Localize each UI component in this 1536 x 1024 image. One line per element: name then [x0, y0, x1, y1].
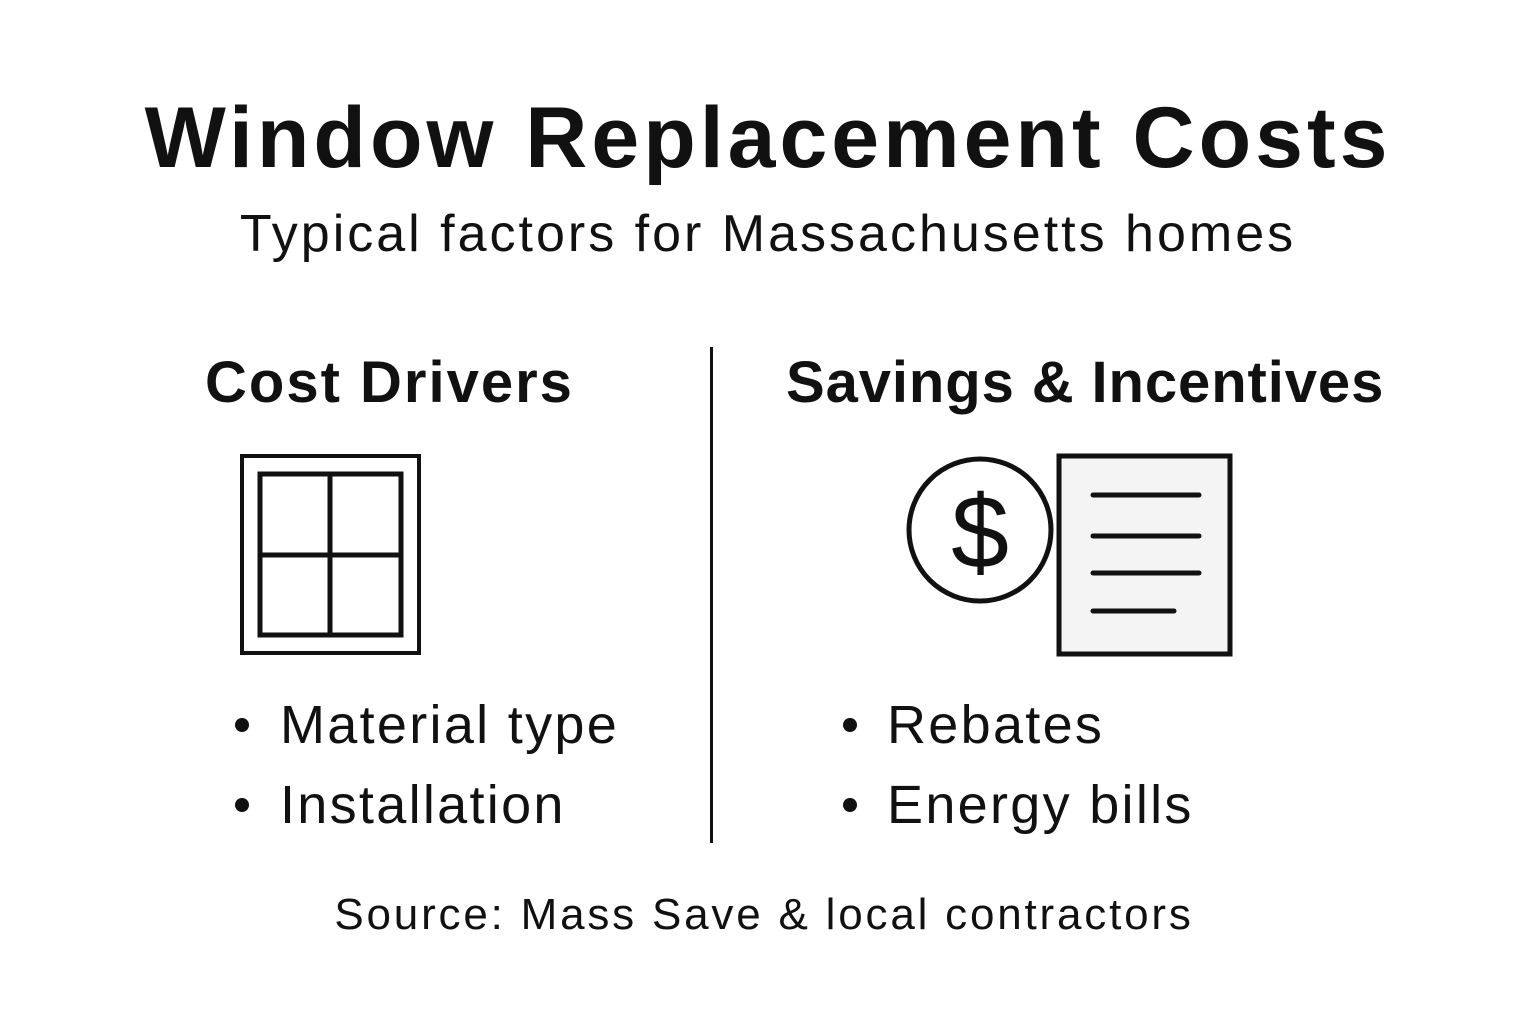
list: savings: Rebates [887, 695, 1104, 755]
list: cost drivers: Installation [280, 775, 566, 835]
list: cost drivers [235, 695, 619, 835]
subtitle: Typical factors for Massachusetts homes [240, 205, 1296, 263]
heading: savings & incentives: Savings & Incentives [786, 350, 1384, 415]
icon: dollar and document: $ [951, 475, 1009, 591]
list: savings [843, 695, 1194, 835]
heading: cost drivers: Cost Drivers [205, 350, 574, 415]
list: cost drivers: Material type [280, 695, 619, 755]
divider [710, 347, 713, 843]
list: savings: Energy bills [887, 775, 1194, 835]
title: Window Replacement Costs [145, 90, 1391, 186]
source: Source: Mass Save & local contractors [334, 890, 1194, 939]
